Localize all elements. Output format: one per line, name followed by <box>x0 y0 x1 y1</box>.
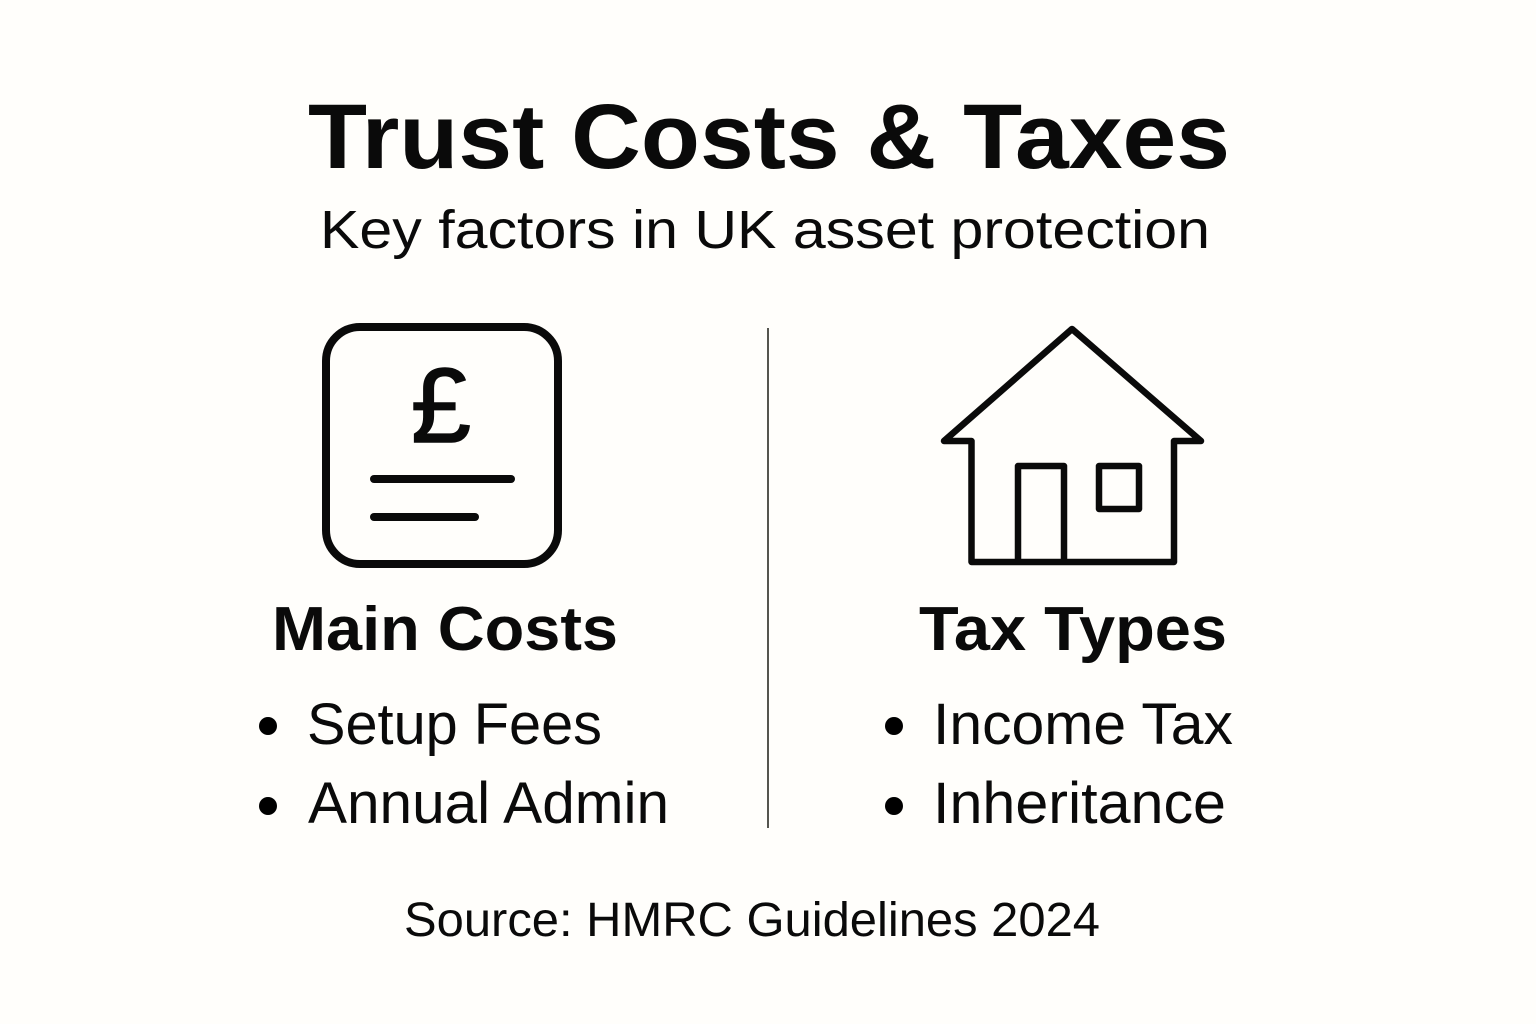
list: costs <box>259 692 669 836</box>
panel: tax types <box>885 329 1233 836</box>
subtitle: Key factors in UK asset protection <box>320 200 1210 260</box>
list: taxes: Inheritance <box>933 771 1226 836</box>
list: costs: Annual Admin <box>308 771 669 836</box>
list: taxes: Income Tax <box>933 692 1233 757</box>
list: taxes <box>885 692 1233 836</box>
panel: main costs <box>259 327 669 836</box>
icon: pound document <box>326 327 558 564</box>
source note: Source: HMRC Guidelines 2024 <box>404 894 1100 947</box>
list: costs: Setup Fees <box>307 692 602 757</box>
heading: tax types: Tax Types <box>919 595 1227 664</box>
icon: pound document: £ <box>411 347 471 465</box>
heading: main costs: Main Costs <box>272 595 618 664</box>
icon: house <box>944 329 1201 562</box>
title: Trust Costs & Taxes <box>308 86 1230 188</box>
